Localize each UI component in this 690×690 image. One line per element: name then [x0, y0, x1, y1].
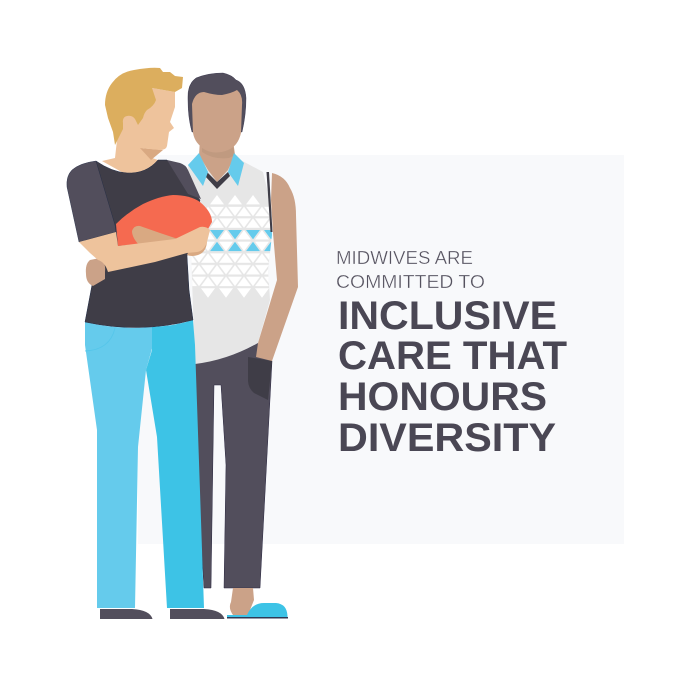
face: [117, 88, 175, 150]
figure: blond man: [67, 68, 224, 619]
sleeve right: [167, 160, 201, 199]
face: [192, 90, 242, 152]
heading: CARE THAT: [338, 334, 567, 378]
trousers: [190, 343, 272, 588]
jeans pocket: [85, 328, 115, 351]
jeans: [85, 320, 204, 608]
t-shirt body: [85, 160, 200, 328]
slipper: [227, 603, 288, 618]
foot: [230, 588, 254, 615]
hair: [105, 68, 183, 145]
heading: DIVERSITY: [338, 416, 556, 460]
hand shadow: [187, 240, 207, 256]
heading: INCLUSIVE: [338, 294, 557, 338]
figure: man with dark hair: [186, 73, 298, 618]
jeans left leg: [85, 322, 153, 608]
baby head: [132, 226, 178, 246]
neck shadow: [202, 146, 235, 158]
shirt v-neck: [205, 172, 230, 189]
intro text: MIDWIVES ARE: [336, 248, 473, 268]
collar: [188, 153, 244, 186]
neck: [102, 140, 158, 175]
neck: [199, 140, 235, 182]
arm: [256, 173, 298, 361]
heading: HONOURS: [338, 375, 547, 419]
vest triangle pattern: [191, 195, 272, 298]
heading: [338, 294, 567, 460]
shoe right: [170, 609, 224, 619]
hair: [188, 73, 246, 132]
armhole trim: [266, 172, 272, 232]
shoe left: [100, 609, 152, 619]
intro text: [336, 248, 485, 292]
jeans right leg: [146, 320, 204, 608]
baby blanket: [116, 195, 212, 246]
background panel: [138, 155, 624, 544]
hand on waist: [86, 258, 105, 286]
slipper sole: [227, 617, 288, 618]
vest: [188, 161, 272, 364]
text block: [336, 248, 567, 460]
sleeve left: [67, 161, 116, 242]
intro text: COMMITTED TO: [336, 272, 485, 292]
pocket: [248, 357, 272, 400]
infographic: [66, 68, 567, 619]
arm: [79, 227, 210, 272]
neck shadow: [140, 148, 163, 160]
